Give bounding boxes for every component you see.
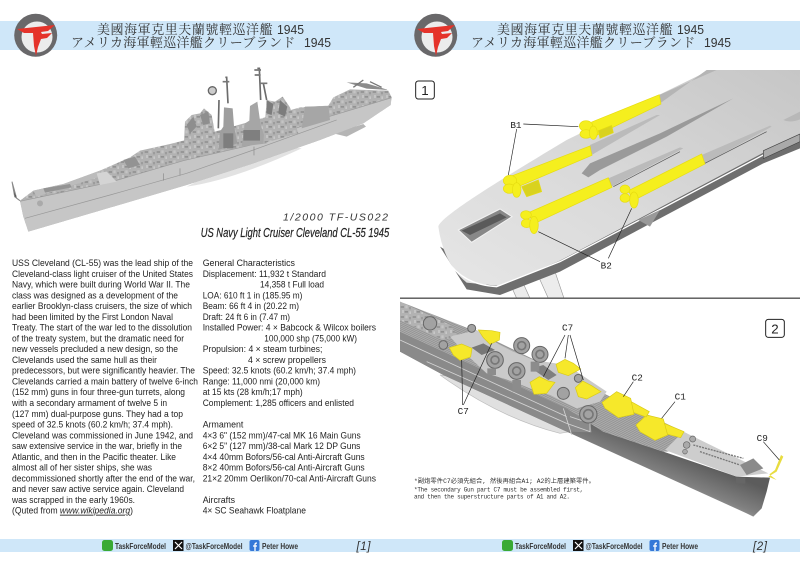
hull fins: [582, 98, 733, 177]
general characteristics text block: 6×2 5" (127 mm)/38-cal Mark 12 DP Guns: [203, 441, 361, 451]
general characteristics text block: Propulsion: 4 × steam turbines;: [203, 344, 322, 354]
part labels: C7: [458, 406, 469, 417]
history text block: speed of 32.5 knots (60.2 km/h; 37.4 mph).: [12, 420, 173, 430]
history text block: Treaty. The start of the war led to the dissolution: [12, 323, 192, 333]
history text block: Clevelands used the same hull as their: [12, 355, 157, 365]
general characteristics text block: 4 × screw propellers: [248, 355, 326, 365]
part labels: [458, 323, 768, 444]
panel: step 2 deck view: [400, 302, 784, 517]
leader lines and labels: B2: [601, 261, 612, 272]
grey shafts: [590, 70, 772, 187]
general characteristics text block: 100,000 shp (75,000 kW): [264, 333, 357, 343]
history text block: with a secondary armament of twelve 5 in: [11, 398, 167, 408]
history text block: class was designed as a development of the: [12, 290, 178, 300]
assembly note: [414, 477, 595, 500]
history text block: Navy, which were built during World War II. The: [12, 280, 190, 290]
bow jackstaff C9: [768, 455, 783, 480]
right page footer: @TaskForceModel: [586, 542, 642, 551]
general characteristics text block: 21×2 20mm Oerlikon/70-cal Anti-Aircraft Guns: [203, 473, 376, 483]
history text block: earlier Brooklyn-class cruisers, the size of which: [12, 301, 192, 311]
fore deck: [665, 432, 768, 477]
turret C7 group: [449, 330, 601, 399]
history text block: new vessels precluded a new design, so the: [12, 344, 178, 354]
lower hull: [440, 133, 800, 295]
history text block: (152 mm) guns in four three-gun turrets, along: [12, 387, 185, 397]
general characteristics text block: Range: 11,000 nmi (20,000 km): [203, 376, 320, 386]
product code: 1/2000 TF-US022: [283, 212, 388, 224]
leader lines: [462, 335, 779, 460]
step badge 1: [416, 81, 434, 99]
right page footer: [400, 539, 800, 553]
hull underwater: [440, 375, 570, 433]
superstructure platform: [450, 330, 607, 408]
history text block: Cleveland was commissioned in June 1942, and: [12, 430, 193, 440]
right page footer: TaskForceModel: [515, 542, 566, 551]
general characteristics text block: Complement: 1,285 officers and enlisted: [203, 398, 354, 408]
history text block: USS Cleveland (CL-55) was the lead ship of the: [12, 258, 193, 268]
right page footer: Peter Howe: [662, 542, 698, 551]
history text block: had been limited by the First London Naval: [12, 312, 173, 322]
ship render: full cruiser: [12, 68, 392, 232]
hull bottom: [438, 70, 800, 286]
history text block: almost all of her sister ships, she was: [12, 463, 152, 473]
turret C2: [602, 392, 649, 418]
left page header: [0, 14, 400, 57]
history text block: (Quted from www.wikipedia.org): [12, 506, 133, 516]
part labels: C9: [757, 433, 768, 444]
general characteristics text block: Displacement: 11,932 t Standard: [203, 269, 326, 279]
history text block: Cleveland-class light cruiser of the United States: [12, 269, 193, 279]
title lines right: 1945: [704, 35, 731, 50]
general characteristics text block: 8×2 40mm Bofors/56-cal Anti-Aircraft Guns: [203, 463, 365, 473]
superstructure: [183, 97, 330, 157]
logo right: [414, 14, 457, 57]
general characteristics text block: LOA: 610 ft 1 in (185.95 m): [203, 290, 302, 300]
turret C1: [636, 415, 684, 440]
history text block: and never saw active service again. Cleveland: [12, 484, 184, 494]
general characteristics text block: 4×3 6" (152 mm)/47-cal MK 16 Main Guns: [203, 430, 361, 440]
masts: [218, 68, 267, 128]
history text block: Clevelands carried a main battery of twelve 6-inch: [12, 376, 198, 386]
left page footer: Peter Howe: [262, 542, 298, 551]
product name: US Navy Light Cruiser Cleveland CL-55 1945: [201, 226, 389, 240]
general characteristics text block: Aircrafts: [203, 495, 235, 505]
general characteristics text block: [203, 258, 376, 516]
assembly note: and then the superstructure parts of A1 and A2.: [414, 493, 570, 500]
assembly note: *The secondary Gun part C7 must be assembled first,: [414, 487, 583, 494]
title lines left: 1945: [304, 35, 331, 50]
leader lines and labels: B1: [510, 120, 522, 131]
part labels: C1: [675, 392, 686, 403]
page number: [2]: [752, 541, 768, 553]
general characteristics text block: 14,358 t Full load: [260, 280, 324, 290]
step badge 2: [766, 319, 784, 337]
general characteristics text block: Beam: 66 ft 4 in (20.22 m): [203, 301, 299, 311]
icon: facebook: [250, 540, 260, 551]
general characteristics text block: Armament: [203, 420, 244, 430]
history text block: predecessors, but were significantly heavier. The: [12, 366, 195, 376]
icon: wechat: [502, 540, 513, 551]
aft structures: [400, 302, 458, 340]
part labels: C7: [562, 323, 573, 334]
supports: [513, 272, 564, 298]
title lines right: アメリカ海軍輕巡洋艦クリーブランド: [471, 32, 696, 51]
title lines left: 1945: [277, 22, 304, 37]
page number: [1]: [356, 541, 371, 553]
part labels: C2: [632, 373, 643, 384]
icon: facebook: [650, 540, 660, 551]
logo left: [14, 14, 57, 57]
hull side: [400, 332, 770, 517]
general characteristics text block: 4×4 40mm Bofors/56-cal Anti-Aircraft Guns: [203, 452, 365, 462]
left page footer: [0, 539, 400, 553]
right page header: [400, 14, 800, 57]
history text block: Atlantic, and then in the Pacific theater. Like: [12, 452, 176, 462]
title lines right: 1945: [677, 22, 704, 37]
panel: step 1 stern underside: [416, 70, 800, 298]
general characteristics text block: at 15 kts (28 km/h;17 mph): [203, 387, 303, 397]
icon: x: [573, 540, 584, 551]
title lines left: アメリカ海軍輕巡洋艦クリーブランド: [71, 32, 296, 51]
general characteristics text block: General Characteristics: [203, 258, 295, 268]
divider between steps: [400, 298, 800, 299]
general characteristics text block: 4× SC Seahawk Floatplane: [203, 506, 306, 516]
icon: wechat: [102, 540, 113, 551]
title lines left: [71, 19, 331, 51]
hatch: [458, 209, 512, 242]
general characteristics text block: Draft: 24 ft 6 in (7.47 m): [203, 312, 290, 322]
assembly note: *副炮零件C7必須先組合, 然後再組合A1; A2的上層建築零件。: [414, 477, 595, 485]
history text block: of the treaty system, but the dramatic need for: [12, 333, 184, 343]
deck: [400, 302, 700, 452]
general characteristics text block: Installed Power: 4 × Babcock & Wilcox boilers: [203, 323, 376, 333]
title lines right: [471, 19, 731, 51]
leader lines and labels: [508, 120, 632, 272]
title lines left: 美國海軍克里夫蘭號輕巡洋艦: [97, 19, 273, 38]
history text block: decommissioned shortly after the end of the war,: [12, 473, 195, 483]
yellow propeller shafts: [503, 95, 705, 234]
left page footer: @TaskForceModel: [186, 542, 242, 551]
step badge 2: 2: [771, 321, 779, 336]
step badge 1: 1: [421, 83, 429, 98]
history text block: saw extensive service in the war, briefly in the: [12, 441, 182, 451]
grey gun tubs: [423, 317, 597, 423]
left page footer: TaskForceModel: [115, 542, 166, 551]
title lines right: 美國海軍克里夫蘭號輕巡洋艦: [497, 19, 673, 38]
icon: x: [173, 540, 184, 551]
history text block: [11, 258, 198, 516]
history text block: (127 mm) dual-purpose guns. They had a top: [12, 409, 183, 419]
yellow turrets: [449, 330, 684, 440]
history text block: was scrapped in the early 1960s.: [11, 495, 135, 505]
general characteristics text block: Speed: 32.5 knots (60.2 km/h; 37.4 mph): [203, 366, 356, 376]
